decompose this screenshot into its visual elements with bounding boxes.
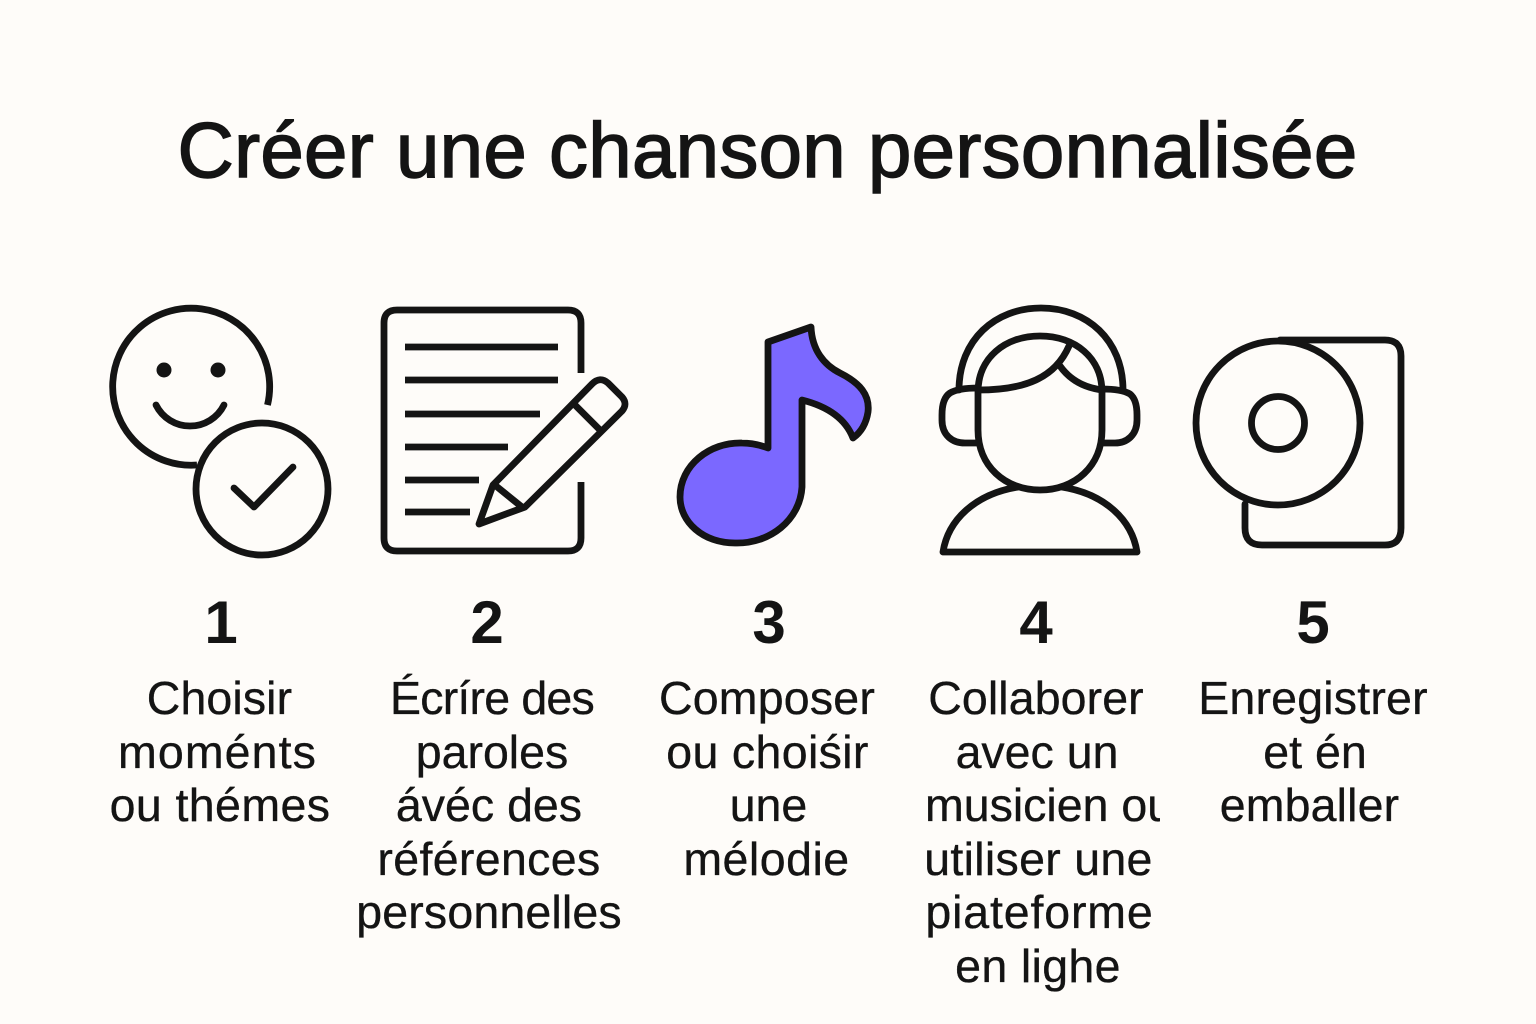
icon: vinyl record and sleeve — [1196, 340, 1401, 545]
step 5 text: et én — [1263, 726, 1367, 778]
step 3 text: mélodie — [683, 833, 850, 885]
step 1 text: ou thémes — [110, 779, 330, 831]
step 5 number: 5 — [1296, 589, 1330, 656]
step 2 text: personnelles — [356, 886, 622, 938]
step 3 number: 3 — [752, 589, 786, 656]
step 5 text: emballer — [1220, 779, 1399, 831]
step 5 text: Enregistrer — [1198, 672, 1428, 724]
step 3 text: ou choiśir — [666, 726, 869, 778]
step 3 text: une — [730, 779, 807, 831]
step 4 number: 4 — [1019, 589, 1053, 656]
title: Créer une chanson personnalisée — [177, 106, 1358, 194]
icon: document with pencil — [384, 310, 625, 551]
step 3 text — [659, 672, 875, 885]
step 2 text — [356, 672, 622, 938]
step 4 text: en lighe — [955, 940, 1121, 992]
step 4 text: Collaborer — [928, 672, 1144, 724]
icon: person with headphones — [942, 308, 1137, 552]
step 5 text — [1198, 672, 1428, 831]
step 1 number: 1 — [204, 589, 238, 656]
step 4 text: avec un — [956, 726, 1118, 778]
step 2 number: 2 — [470, 589, 504, 656]
step 2 text: références — [377, 833, 601, 885]
icon: smiley with check — [113, 308, 328, 555]
step 4 text: piateforme — [925, 886, 1154, 938]
step 2 text: ávéc des — [396, 779, 582, 831]
step 4 text — [924, 672, 1160, 992]
step 4 text: utiliser une — [924, 833, 1153, 885]
icon: music note — [680, 327, 868, 543]
step 2 text: Écríre des — [390, 672, 594, 724]
step 1 text — [110, 672, 330, 831]
step 3 text: Composer — [659, 672, 875, 724]
step 2 text: paroles — [416, 726, 568, 778]
step 1 text: moménts — [118, 726, 317, 778]
step 1 text: Choisir — [147, 672, 292, 724]
